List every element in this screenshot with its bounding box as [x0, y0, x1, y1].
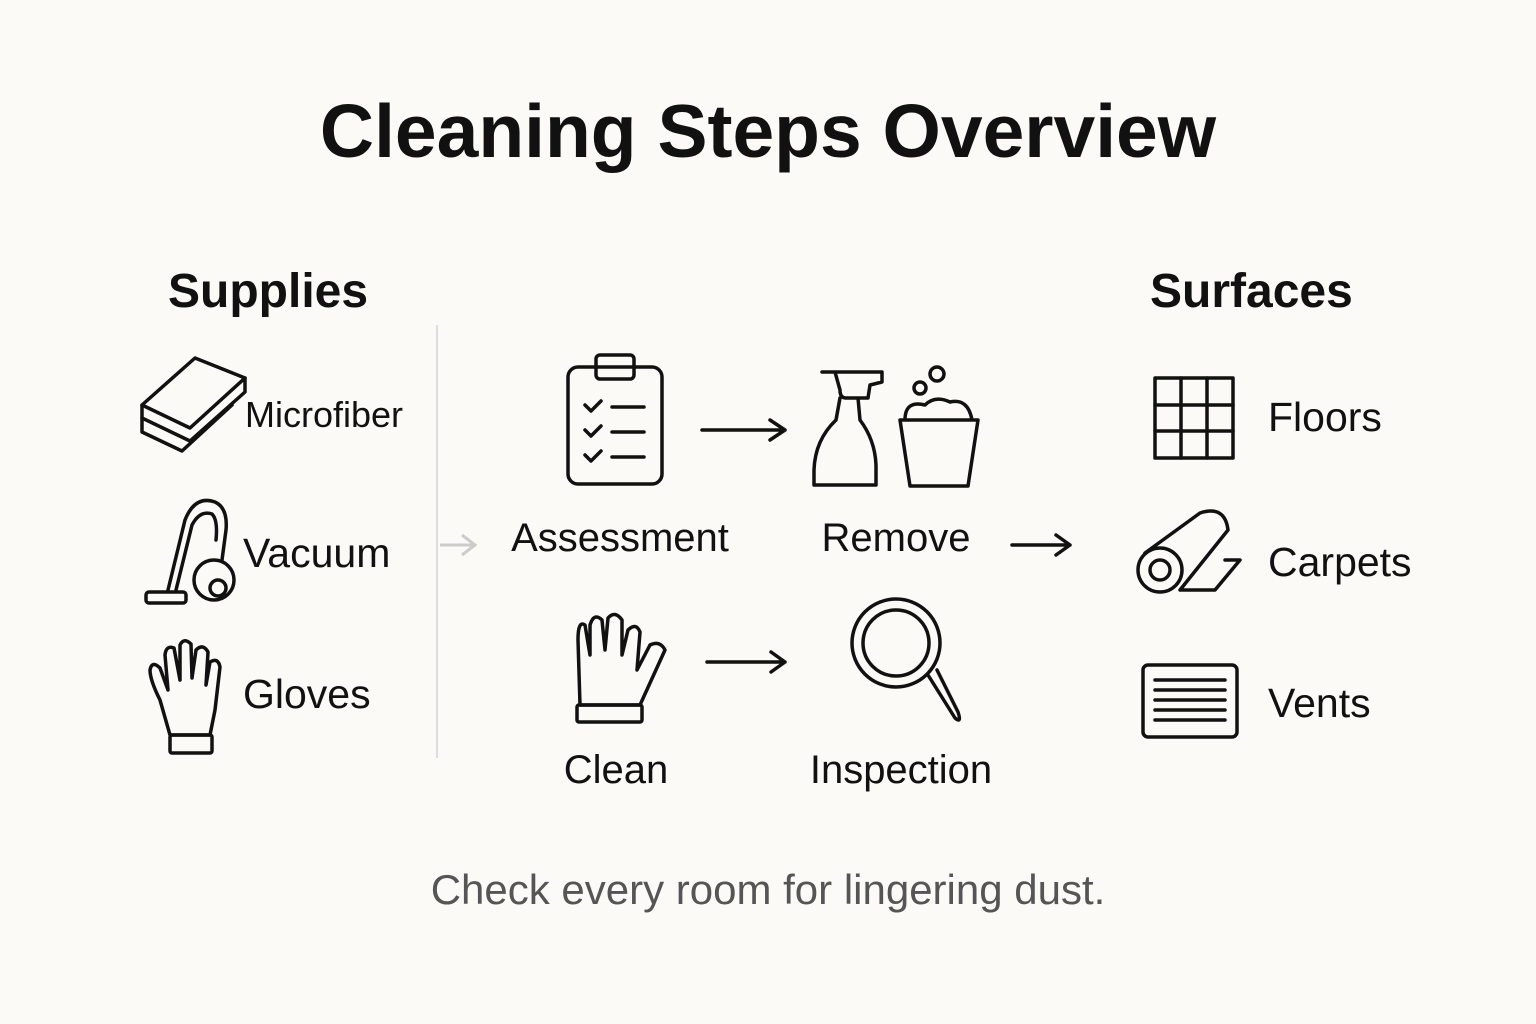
footer note: Check every room for lingering dust.	[431, 866, 1105, 913]
icon: vent	[1143, 665, 1237, 737]
icon: microfiber	[142, 358, 245, 451]
step labels: Assessment	[511, 516, 729, 560]
step labels: Clean	[564, 748, 668, 792]
title: Cleaning Steps Overview	[320, 89, 1217, 173]
icon: glove	[577, 614, 665, 722]
icon: magnifier	[852, 599, 959, 720]
arrow: supplies to steps	[440, 535, 475, 555]
step labels	[511, 516, 992, 792]
icon: spray and bucket	[814, 367, 978, 486]
supply labels: Gloves	[243, 671, 371, 717]
icon: vacuum	[146, 500, 234, 603]
surface labels	[1268, 394, 1412, 726]
surface labels: Floors	[1268, 394, 1382, 440]
surface labels: Carpets	[1268, 539, 1412, 585]
surface labels: Vents	[1268, 680, 1371, 726]
supply labels: Vacuum	[243, 530, 390, 576]
supply labels	[243, 394, 403, 717]
step labels: Inspection	[810, 748, 992, 792]
arrow	[1012, 535, 1070, 555]
icon: clipboard	[568, 355, 662, 484]
arrow	[702, 420, 785, 440]
icon: gloves	[150, 641, 220, 753]
icon: floors grid	[1155, 378, 1233, 458]
panel: supplies	[142, 358, 245, 753]
arrow	[707, 652, 785, 672]
icon: carpet roll	[1138, 511, 1240, 592]
heading: supplies: Supplies	[168, 265, 368, 318]
panel: steps	[568, 355, 1070, 722]
supply labels: Microfiber	[245, 394, 403, 435]
heading: surfaces: Surfaces	[1150, 265, 1353, 318]
step labels: Remove	[822, 516, 970, 560]
panel: surfaces	[1138, 378, 1240, 737]
